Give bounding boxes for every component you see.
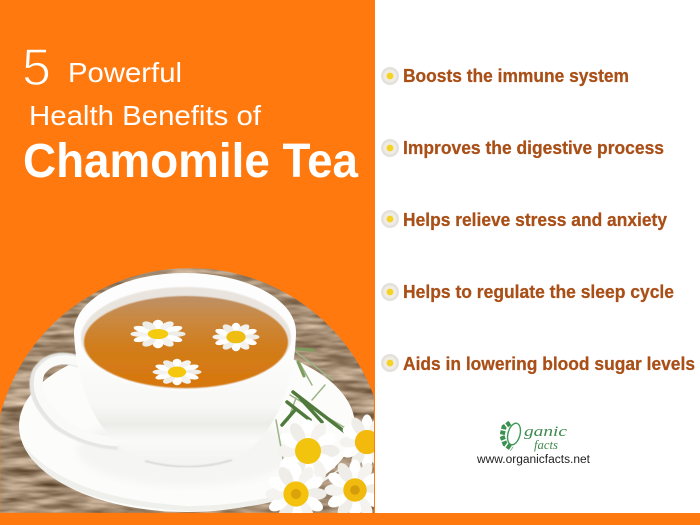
benefit 1: Boosts the immune system bbox=[403, 66, 629, 86]
title bbox=[22, 39, 358, 188]
icon: daisy bullet bbox=[381, 139, 399, 157]
floating flower 3 bbox=[153, 359, 201, 385]
title line: Powerful: Powerful bbox=[68, 57, 182, 88]
logo leaf spiral bbox=[502, 422, 523, 449]
panel: orange title background bbox=[0, 0, 375, 525]
logo: Organic Facts bbox=[476, 422, 591, 466]
cup handle bbox=[36, 359, 118, 444]
benefit 4: Helps to regulate the sleep cycle bbox=[403, 282, 674, 302]
cup body bbox=[74, 332, 296, 444]
icon: daisy bullet bbox=[381, 283, 399, 301]
icon: daisy bullet bbox=[381, 354, 399, 372]
cup rim bbox=[74, 273, 296, 337]
title number 5: 5 bbox=[22, 39, 51, 97]
title line: Health Benefits of: Health Benefits of bbox=[29, 100, 261, 131]
daisy: bottom left bbox=[266, 464, 327, 513]
chamomile sprigs bbox=[275, 348, 345, 460]
icon: daisy bullet bbox=[381, 210, 399, 228]
benefit 3: Helps relieve stress and anxiety bbox=[403, 210, 667, 230]
website url: www.organicfacts.net bbox=[476, 454, 591, 466]
floating flower 2 bbox=[213, 323, 259, 351]
panel: white benefits background bbox=[375, 0, 700, 513]
title line: Chamomile Tea: Chamomile Tea bbox=[23, 135, 358, 188]
floating flower 1 bbox=[130, 320, 186, 348]
logo: Organic Facts: facts bbox=[534, 437, 558, 452]
wood mat bbox=[0, 268, 374, 513]
logo wordmark: ganic bbox=[524, 424, 567, 440]
benefit 5: Aids in lowering blood sugar levels bbox=[403, 354, 695, 374]
daisy: bottom right bbox=[324, 460, 374, 513]
daisy: right bbox=[340, 414, 374, 466]
daisy: centre bbox=[280, 419, 340, 478]
benefits list bbox=[381, 66, 695, 374]
benefit 2: Improves the digestive process bbox=[403, 138, 664, 158]
icon: daisy bullet bbox=[381, 67, 399, 85]
saucer bbox=[19, 360, 354, 512]
tea surface bbox=[84, 296, 288, 388]
bottom orange band bbox=[0, 513, 700, 525]
photo: chamomile tea cup on wood bbox=[0, 268, 395, 525]
